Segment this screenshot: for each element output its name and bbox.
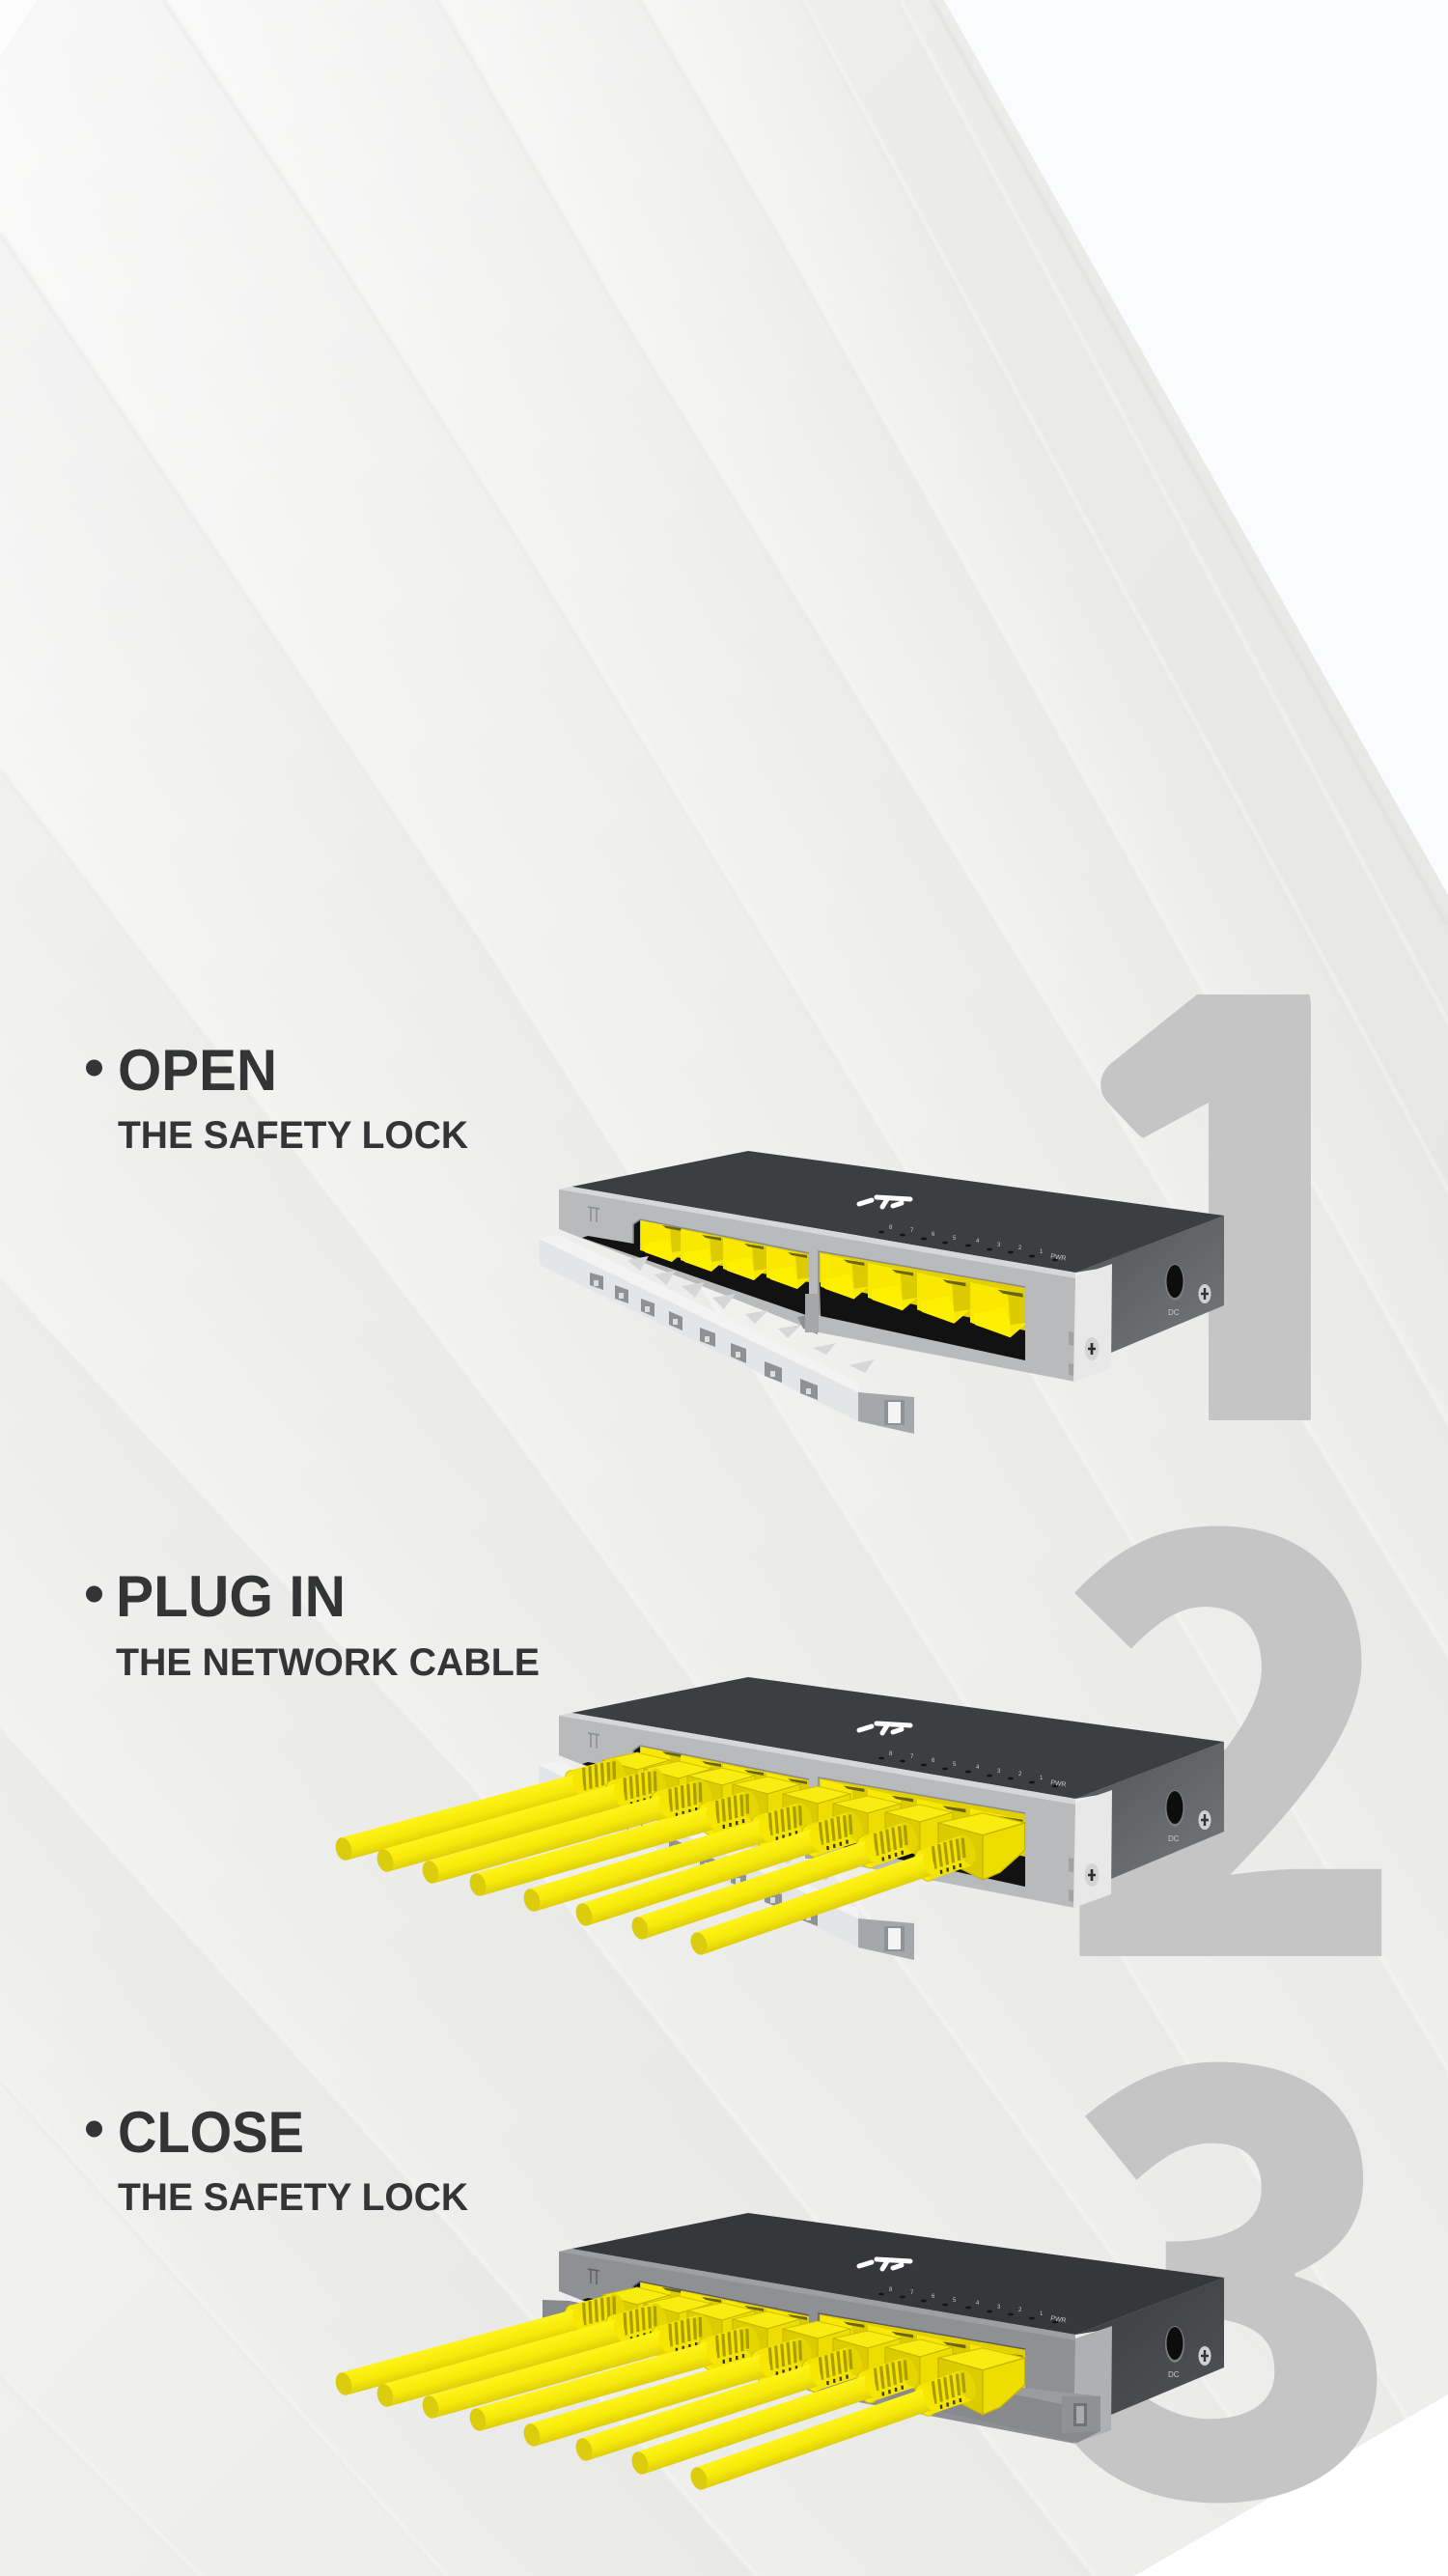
step 1 heading: open the safety lock [86, 1038, 468, 1157]
step 3 RJ45 plugs [602, 2287, 1025, 2415]
step 3 switch with closed safety lock: PWR [1050, 2315, 1067, 2325]
step 1 switch with open safety lock: 87654321 [889, 1225, 1044, 1255]
step 3 heading: close the safety lock [86, 2100, 468, 2219]
step 2 switch with cables plugged in [539, 1677, 1224, 1960]
step 3 heading: close the safety lock: CLOSE [118, 2100, 304, 2165]
step number 1: 1 [1043, 949, 1434, 1504]
step 2 heading: plug in the network cable [86, 1564, 540, 1684]
step 2 RJ45 plugs [602, 1752, 1025, 1880]
step 2 heading: plug in the network cable: PLUG IN [116, 1564, 346, 1629]
step 3 yellow network cables [332, 2291, 980, 2497]
step 3 switch with closed safety lock [559, 2213, 1224, 2444]
step 2 yellow network cables [332, 1756, 980, 1962]
step 3 switch with closed safety lock: 87654321 [889, 2287, 1044, 2317]
step 3 switch with closed safety lock: DC [1168, 2370, 1180, 2379]
step 2 switch with cables plugged in: 87654321 [889, 1751, 1044, 1781]
step 1 switch with open safety lock: DC [1168, 1308, 1180, 1317]
step 2 switch with cables plugged in: DC [1168, 1834, 1180, 1843]
step 1 switch with open safety lock: PWR [1050, 1253, 1067, 1263]
step 1 heading: open the safety lock: OPEN [118, 1038, 277, 1103]
step 1 switch with open safety lock [539, 1151, 1224, 1434]
step 2 heading: plug in the network cable: THE NETWORK CABLE [116, 1641, 540, 1684]
step number 2: 2 [1055, 1283, 1411, 2124]
step 2 switch with cables plugged in: PWR [1050, 1779, 1067, 1789]
step 3 closed lock bar [543, 2300, 1100, 2443]
step 3 heading: close the safety lock: THE SAFETY LOCK [118, 2176, 468, 2219]
step 1 heading: open the safety lock: THE SAFETY LOCK [118, 1114, 468, 1157]
